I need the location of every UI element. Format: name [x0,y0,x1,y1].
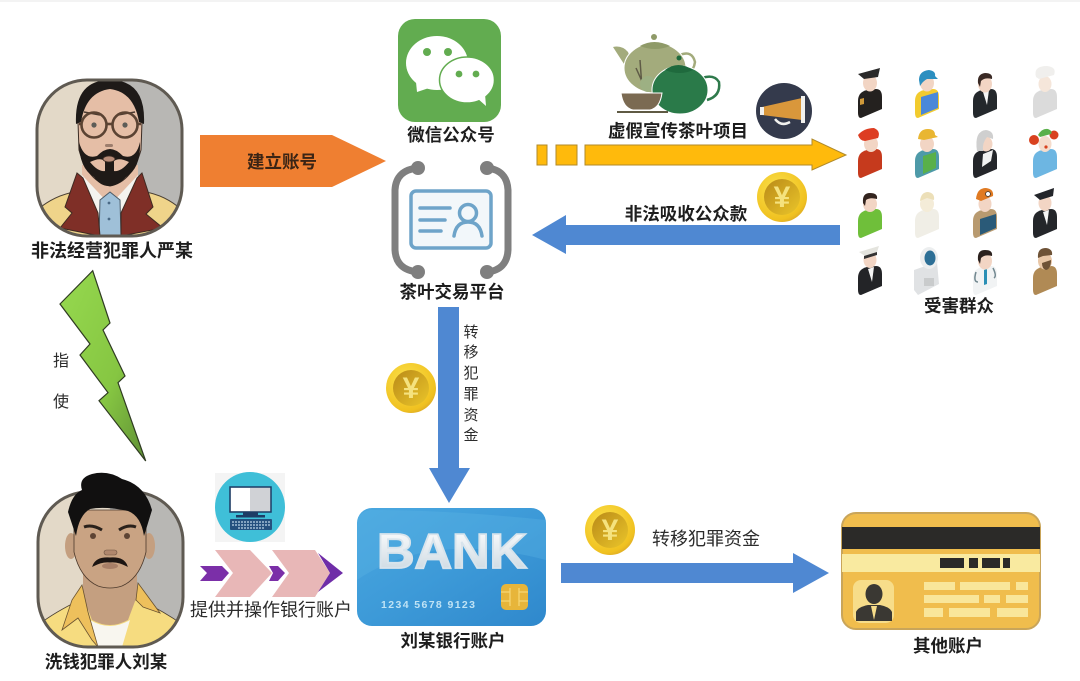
vertical label: transfer funds: 移 [463,344,479,361]
label: Yan: 非法经营犯罪人严某 [31,240,193,261]
label: false tea promotion: 虚假宣传茶叶项目 [608,121,748,141]
arrow label: create account: 建立账号 [247,152,317,172]
label: other accounts: 其他账户 [913,636,983,656]
lightning: instruct [60,271,146,461]
arrow: chevrons [200,550,343,597]
yellow bank card [842,513,1040,629]
victim: athlete [858,193,882,238]
vertical label: transfer funds: 罪 [463,386,479,403]
vertical label: transfer funds: 金 [463,427,479,444]
victim: chef [1033,66,1057,118]
icon: WeChat [398,19,501,122]
label: illegal deposits: 非法吸收公众款 [625,204,748,224]
label: instruct 1: 指 [53,352,69,370]
label: transfer funds: 转移犯罪资金 [652,529,760,549]
portrait: Liu [38,473,183,647]
victim: pilot [1033,188,1057,238]
victim: businessman [973,73,997,118]
victim: firefighter [858,128,882,178]
label: victims: 受害群众 [924,296,994,316]
label: WeChat account: 微信公众号 [407,125,495,145]
vertical label: transfer funds: 资 [463,407,479,424]
portrait: Yan [37,80,182,236]
coin: middle: ¥ [403,372,420,405]
label: provide bank account: 提供并操作银行账户 [190,600,352,620]
victim: doctor [973,250,997,295]
victim: captain [858,246,882,295]
arrow: money back to platform [532,215,840,254]
victim: miner [973,188,997,238]
coin: top: ¥ [774,181,791,214]
label: instruct 2: 使 [53,393,69,411]
vertical label: transfer funds: 犯 [463,365,479,382]
victim: builder [915,129,939,178]
icon: tea platform [395,161,508,279]
vertical label: transfer funds [463,324,479,444]
victim: astronaut [914,247,939,295]
vertical label: transfer funds: 转 [463,324,479,341]
arrow: transfer right [561,553,829,593]
arrow: create account [200,135,386,187]
arrow: transfer down [429,307,470,503]
label: Liu bank account: 刘某银行账户 [400,631,506,651]
victim: police [858,68,882,118]
victims grid [858,66,1058,295]
victim: bearded man [1033,248,1057,295]
bank card [357,508,546,626]
victim: clown [1029,129,1058,178]
coin: bottom: ¥ [602,514,619,547]
label: tea trading platform: 茶叶交易平台 [400,282,504,302]
icon: megaphone [756,83,812,139]
label: Liu: 洗钱犯罪人刘某 [45,652,168,672]
arrow: promotion to victims [537,139,846,170]
coin: bottom [585,505,635,555]
victim: worker [915,70,939,118]
victim: pale figure [915,192,939,238]
bank card: 1234 5678 9123 [381,599,475,611]
victim: judge [973,130,997,178]
coin: top [757,172,807,222]
icon: teapots [613,34,719,114]
icon: computer [215,472,285,542]
bank card: BANK [377,525,527,579]
coin: middle [386,363,436,413]
